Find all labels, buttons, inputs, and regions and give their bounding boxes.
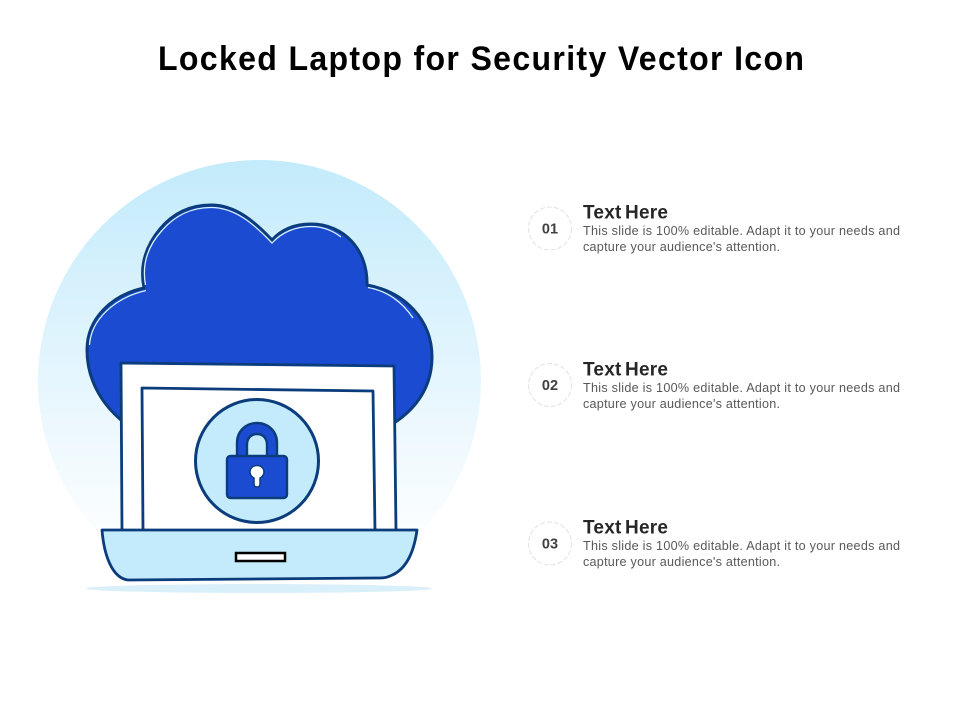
icon: padlock	[227, 423, 287, 498]
cloud highlight	[90, 208, 413, 345]
description 01: capture your audience's attention.	[583, 240, 780, 254]
number badge 03	[528, 522, 572, 565]
item 03	[528, 518, 904, 569]
number badge 03: 03	[542, 536, 558, 552]
cloud	[87, 205, 432, 423]
description 03: capture your audience's attention.	[583, 555, 780, 569]
item 01	[528, 202, 904, 254]
title: Locked Laptop for Security Vector Icon	[158, 40, 804, 78]
laptop screen inner	[142, 388, 375, 531]
number badge 02: 02	[542, 378, 558, 394]
description 01: This slide is 100% editable. Adapt it to your needs and	[583, 224, 900, 238]
laptop trackpad slot	[236, 553, 285, 561]
description 02: capture your audience's attention.	[583, 397, 780, 411]
description 02: This slide is 100% editable. Adapt it to your needs and	[583, 381, 900, 395]
ground shadow	[86, 584, 432, 593]
laptop screen frame	[121, 363, 396, 531]
number badge 01	[528, 207, 572, 250]
description 03: This slide is 100% editable. Adapt it to your needs and	[583, 539, 900, 553]
background circle	[38, 160, 481, 602]
number badge 02	[528, 364, 572, 406]
lock badge circle	[196, 400, 318, 522]
heading 02: Text Here	[583, 360, 668, 380]
laptop base	[102, 530, 417, 580]
heading 01: Text Here	[583, 202, 668, 224]
illustration: locked laptop with cloud	[38, 160, 481, 602]
number badge 01: 01	[542, 222, 558, 238]
item 02	[528, 360, 904, 411]
heading 03: Text Here	[583, 518, 668, 538]
